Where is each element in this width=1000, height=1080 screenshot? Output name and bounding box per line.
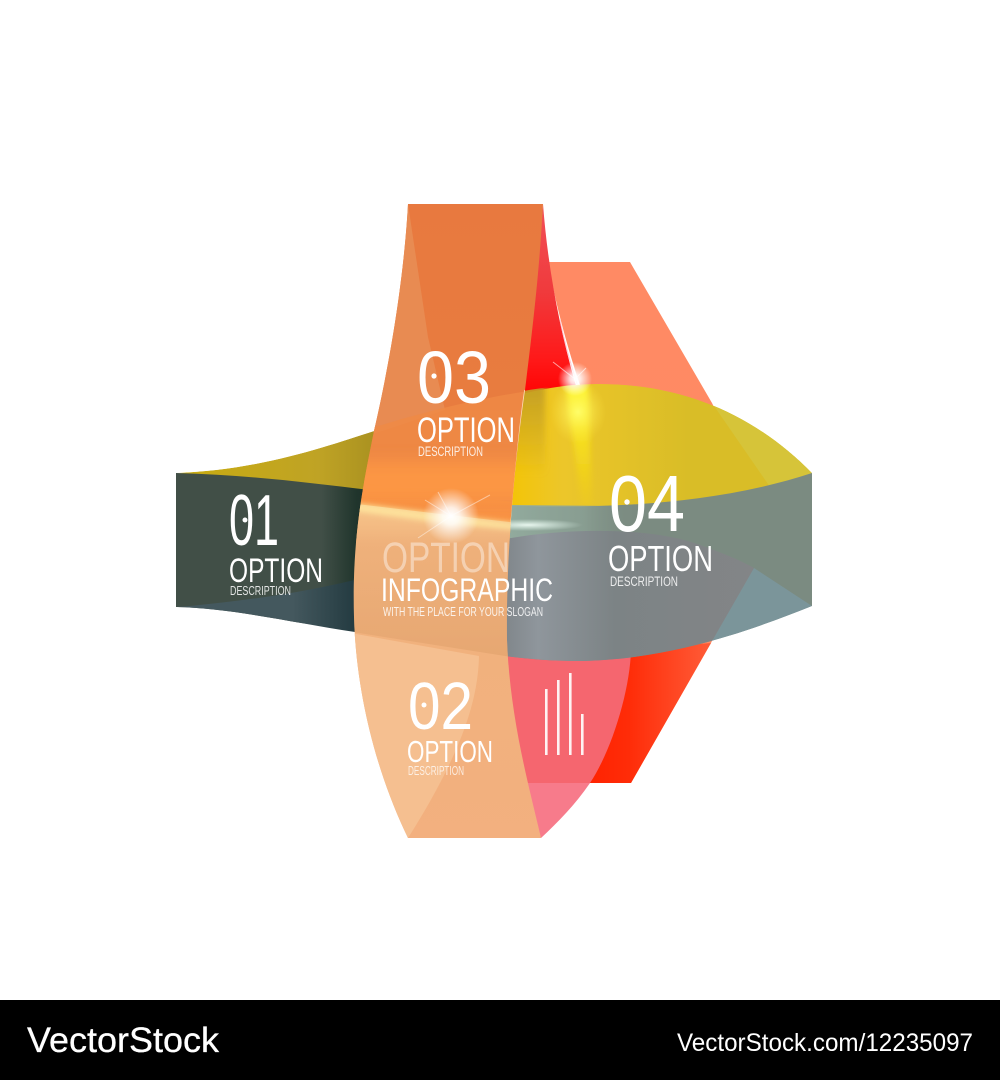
red lower face — [585, 643, 711, 783]
panel: horizontal band — [176, 380, 812, 661]
stock url: VectorStock.com/12235097 — [677, 1029, 973, 1057]
grey right band — [500, 473, 812, 661]
number: 03 — [417, 336, 491, 419]
panel: red back shape — [510, 204, 770, 783]
zero dot — [624, 499, 630, 505]
slogan: WITH THE PLACE FOR YOUR SLOGAN — [383, 605, 543, 619]
description: DESCRIPTION — [418, 444, 483, 459]
zero dot — [242, 518, 248, 522]
description: DESCRIPTION — [408, 764, 464, 778]
pale teal tint near the ribbon — [510, 505, 606, 538]
flare rays — [418, 492, 490, 538]
salmon upper face — [548, 262, 770, 783]
yellow left ribbon — [178, 431, 374, 490]
flare: top — [553, 362, 592, 396]
number: 02 — [408, 669, 473, 744]
panel: pink curved shape — [500, 650, 631, 838]
wordmark: VectorStock — [27, 1021, 220, 1060]
black strip — [0, 1000, 1000, 1080]
panel: vertical orange ribbon — [354, 204, 543, 838]
icon: bars — [545, 673, 584, 755]
flare halo — [558, 362, 592, 396]
option 04 — [608, 459, 713, 589]
centre title — [381, 534, 553, 619]
label: OPTION — [608, 538, 713, 579]
lower left pale facet — [345, 632, 479, 838]
yellow right ribbon — [500, 384, 812, 507]
option 03 — [417, 336, 515, 459]
description: DESCRIPTION — [230, 583, 291, 598]
zero dot — [422, 702, 426, 708]
bright sun line — [355, 503, 530, 531]
flare halo — [423, 488, 479, 544]
faded title word: OPTION — [382, 534, 510, 582]
peach lower part — [354, 504, 541, 838]
bright red fold — [510, 204, 576, 400]
pale yellow right face — [712, 403, 812, 487]
lighter left strip — [374, 204, 444, 432]
flare: centre — [418, 488, 490, 544]
number: 01 — [229, 481, 279, 561]
lighter overlap below the band edge — [364, 392, 524, 482]
grey dome overlay — [500, 531, 754, 661]
zero dot — [431, 373, 437, 379]
horizontal band shadow on ribbon — [354, 582, 508, 656]
dark left band — [176, 473, 370, 632]
label: OPTION — [417, 411, 515, 450]
title word: INFOGRAPHIC — [381, 572, 553, 608]
blue lower left facet — [178, 580, 355, 632]
number: 04 — [609, 459, 685, 548]
footer bar — [0, 1000, 1000, 1080]
pink lower tip — [515, 783, 590, 838]
flare rays — [553, 362, 586, 379]
option 01 — [229, 481, 323, 598]
thin right ribbon edge — [511, 390, 525, 525]
teal lower right facet — [704, 568, 812, 643]
orange upper part — [356, 204, 543, 544]
gold shadow beside the ribbon — [516, 388, 549, 459]
light edge of the fold — [560, 320, 577, 384]
label: OPTION — [407, 734, 493, 769]
teal streak of light — [510, 520, 578, 530]
yellow light beam — [566, 386, 592, 506]
description: DESCRIPTION — [610, 573, 678, 589]
option 02 — [407, 669, 493, 778]
yellow glow — [556, 391, 600, 436]
pink body — [500, 650, 631, 783]
label: OPTION — [229, 552, 323, 590]
warm glow near the flare — [360, 464, 516, 504]
